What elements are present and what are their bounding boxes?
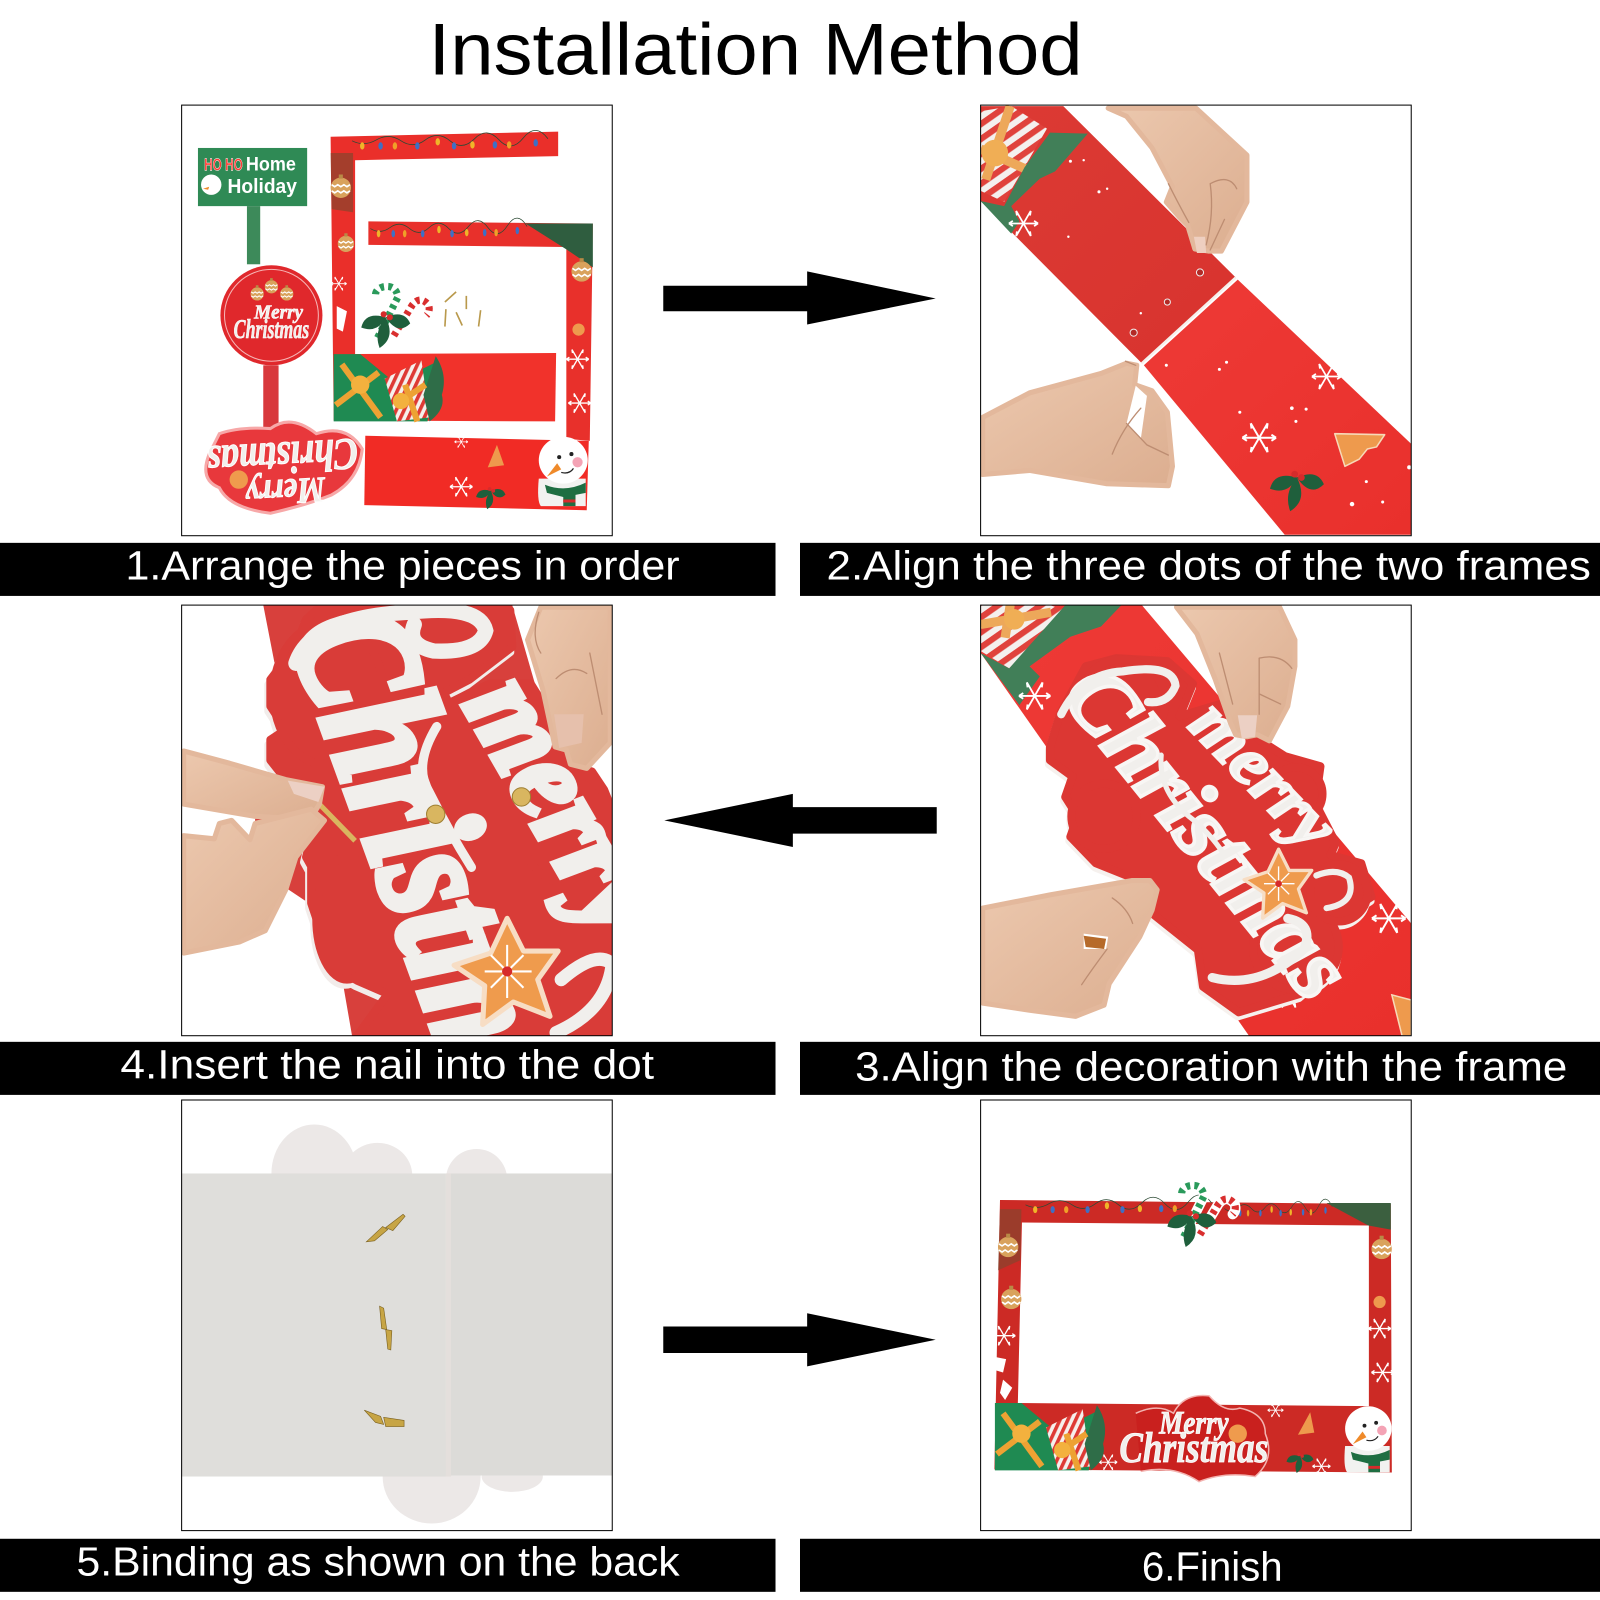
panel 4 border: [182, 605, 612, 1036]
green leaf: [981, 605, 1121, 705]
top-left frame piece: [331, 132, 558, 421]
panel: step 3 align decoration: [981, 605, 1411, 1036]
pine corners: [1327, 1203, 1391, 1230]
white shards: [996, 1357, 1012, 1400]
upside-down decoration: [206, 422, 362, 515]
candy cane: [361, 286, 429, 348]
green sign: Holiday: [228, 176, 298, 198]
caption bar 5: [0, 1539, 776, 1592]
cookie tree: [1335, 434, 1385, 466]
gift stripes: [981, 605, 1065, 668]
bottom hand detail: [1082, 898, 1133, 985]
right hand detail: [535, 612, 602, 748]
panel: step 6 finished frame: [981, 1100, 1411, 1531]
arrow: step 5 to step 6: [663, 1313, 936, 1366]
panel 2 border: [981, 105, 1411, 536]
caption bar 1: [0, 543, 776, 596]
lower red frame: [1144, 280, 1411, 535]
fingernail left: [288, 781, 324, 802]
fastener middle: [380, 1306, 392, 1350]
bottom frame piece: [364, 436, 589, 510]
decoration edge: [1049, 662, 1370, 1016]
star cookie: [1244, 849, 1312, 918]
gift stripes: [981, 106, 1047, 202]
top hand: [1177, 607, 1295, 741]
cookie: [1392, 995, 1411, 1036]
panel: step 1 arrange pieces: [198, 130, 593, 515]
round red sign: [220, 265, 322, 428]
upper red frame: [981, 106, 1236, 363]
caption bar 6: 6.Finish: [1142, 1544, 1283, 1590]
bottom hand: [983, 881, 1157, 1016]
gingerbread: [1373, 1296, 1386, 1308]
candy cane: [1167, 1185, 1235, 1247]
caption bar 5: 5.Binding as shown on the back: [77, 1539, 680, 1585]
script text: merry: merry: [1175, 684, 1353, 864]
seam shadow: [446, 1173, 451, 1477]
caption bar 6: [800, 1539, 1600, 1592]
cookie: [1298, 1412, 1314, 1435]
bottom hand: [983, 363, 1172, 486]
arrow: step 3 to step 4: [664, 794, 937, 847]
lettering flourishes: [296, 610, 612, 1033]
holes: [1130, 269, 1204, 336]
right sheet: [446, 1173, 612, 1476]
panel 5 border: [182, 1100, 612, 1531]
red frame: [981, 605, 1411, 1036]
caption bar 2: 2.Align the three dots of the two frames: [827, 543, 1591, 589]
nail being inserted: [316, 801, 355, 841]
top hand detail: [1168, 180, 1237, 253]
Merry Christmas decoration: Christmas: [1119, 1425, 1268, 1472]
Merry Christmas decoration: [1119, 1396, 1269, 1482]
title: Installation Method: [429, 7, 1083, 90]
ribbon: [981, 106, 1027, 180]
ornaments: [998, 1234, 1018, 1257]
lights: [1026, 1195, 1212, 1213]
upper left finger: [184, 751, 322, 819]
gift bottom piece: [334, 353, 556, 421]
green sign: [198, 148, 307, 264]
Merry Christmas decoration: Merry: [1158, 1406, 1229, 1442]
gift box: [334, 354, 444, 421]
panel: step 5 binding on back: [182, 1100, 612, 1531]
finger gap and creases: [1112, 361, 1168, 455]
fastener bottom: [364, 1410, 404, 1427]
upside-down decoration: Christmas: [206, 429, 359, 487]
script text: Christmas: Christmas: [254, 582, 624, 1182]
snowman: [538, 437, 588, 506]
lower left hand: [184, 809, 324, 953]
red decoration: [1050, 658, 1371, 1012]
holly leaf: [981, 133, 1088, 234]
panel: step 2 align dots: [981, 105, 1411, 536]
right hand: [528, 607, 610, 768]
top hand detail: [1219, 653, 1292, 739]
lettering flourishes: [1061, 669, 1351, 980]
red decoration: [270, 610, 612, 1036]
lights on top strip: [352, 130, 548, 150]
arrow: step 1 to step 2: [663, 271, 936, 324]
caption bar 3: 3.Align the decoration with the frame: [855, 1044, 1567, 1090]
red frame behind: [255, 606, 535, 1036]
round red sign: Merry: [253, 301, 304, 323]
snowflakes: [1009, 211, 1038, 236]
frame: [994, 1200, 1392, 1472]
caption bar 1: 1.Arrange the pieces in order: [126, 543, 680, 589]
upside-down decoration: Merry: [244, 470, 327, 515]
script text: merry: merry: [439, 651, 692, 957]
holly: [1287, 1453, 1313, 1473]
gift: [995, 1403, 1105, 1470]
white dots: [1067, 159, 1411, 506]
fastener top: [366, 1214, 405, 1242]
green sign: Home: [246, 153, 296, 175]
snowflakes: [993, 1326, 1015, 1345]
panel 6 border: [981, 1100, 1411, 1531]
left sheet: [182, 1173, 446, 1477]
scalloped decoration back: [271, 1124, 543, 1523]
panel: step 4 insert nail: [182, 606, 612, 1036]
script text: Christmas: Christmas: [1044, 646, 1371, 1018]
snowflakes: [1019, 682, 1050, 709]
caption bar 4: 4.Insert the nail into the dot: [120, 1042, 655, 1088]
panel 1 border: [182, 105, 612, 536]
ornaments: [331, 174, 351, 198]
round red sign: Christmas: [234, 313, 309, 344]
paper fasteners: [445, 292, 481, 327]
left side snow: [331, 277, 347, 290]
pine corner: [331, 153, 353, 212]
decoration edge: [264, 622, 514, 1000]
caption bar 4: [0, 1042, 776, 1095]
ribbon: [981, 605, 1051, 638]
holly: [1270, 471, 1324, 511]
green sign: HO HO: [204, 154, 243, 174]
top hand: [1108, 108, 1247, 251]
snowman: [1344, 1406, 1392, 1472]
star cookie: [454, 918, 558, 1024]
right frame piece: [368, 221, 593, 441]
seam: [1142, 278, 1236, 363]
brass nail heads: [427, 788, 531, 823]
panel 3 border: [981, 605, 1411, 1036]
